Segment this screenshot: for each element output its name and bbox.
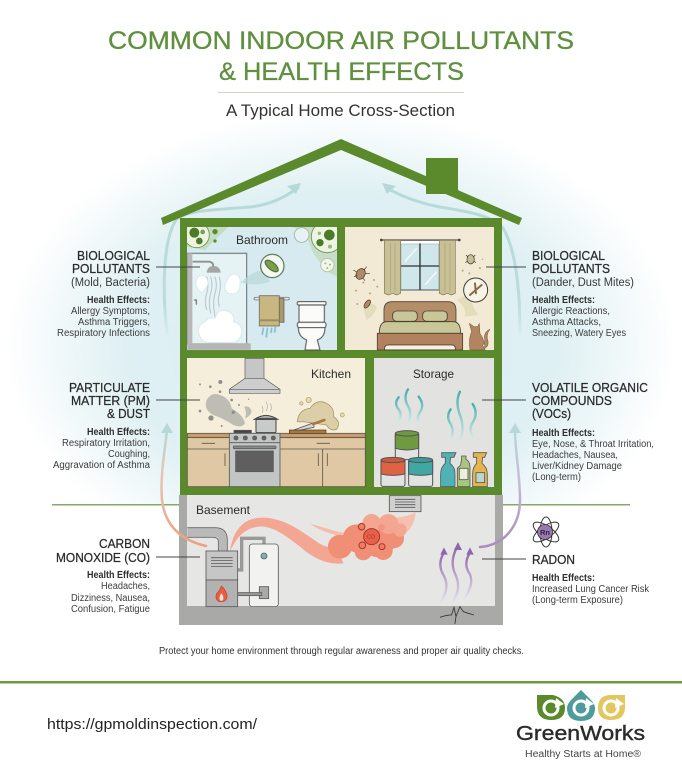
- logo: GreenWorks: Healthy Starts at Home®: [525, 749, 642, 760]
- carbon monoxide plume: CO: [367, 535, 375, 541]
- ground line: [52, 504, 630, 506]
- callout: VOCs: Eye, Nose, & Throat Irritation,: [532, 439, 654, 450]
- furnace: [206, 551, 238, 607]
- callout: VOCs: COMPOUNDS: [532, 394, 612, 408]
- bed: [377, 302, 463, 350]
- logo: GreenWorks: [516, 690, 645, 760]
- callout: biological pollutants (mold): Allergy Symptoms,: [71, 306, 150, 317]
- callout: VOCs: [482, 381, 654, 483]
- callout: particulate matter: Respiratory Irritation,: [62, 438, 150, 449]
- panel: bedroom: [353, 239, 490, 350]
- callout: biological pollutants (dander): Allergic Reactions,: [532, 306, 610, 317]
- callout: particulate matter: MATTER (PM): [71, 394, 150, 408]
- foundation crack: [440, 607, 474, 624]
- basement shell: [179, 495, 503, 625]
- callout: radon: RADON: [532, 553, 575, 567]
- icon: green swirl: [537, 695, 565, 720]
- callout: carbon monoxide: Dizziness, Nausea,: [71, 593, 150, 604]
- callout: biological pollutants (dander): (Dander, Dust Mites): [532, 277, 634, 289]
- panel: bathroom: [184, 221, 343, 350]
- water heater: [238, 538, 278, 607]
- website url: https://gpmoldinspection.com/: [47, 716, 258, 733]
- rising arrows from basement: [161, 423, 521, 547]
- dust mites: [353, 255, 478, 320]
- cleaning bottles: [441, 453, 487, 487]
- label: Basement: Basement: [196, 503, 251, 517]
- cabinets: [187, 433, 365, 487]
- callout: biological pollutants (dander): Sneezing, Watery Eyes: [532, 328, 626, 339]
- callout: biological pollutants (dander): BIOLOGICAL: [532, 249, 605, 263]
- callout: VOCs: Health Effects:: [532, 428, 595, 439]
- icon: teal swirl: [567, 690, 595, 721]
- icon: radon atom: [530, 517, 562, 547]
- callout: carbon monoxide: CARBON: [99, 537, 150, 551]
- walls: [180, 218, 502, 495]
- bacteria callout: [241, 254, 284, 284]
- title: [108, 27, 574, 86]
- label: Kitchen: Kitchen: [311, 367, 351, 381]
- icon: yellow swirl: [598, 695, 625, 720]
- callout: biological pollutants (mold): Asthma Triggers,: [78, 317, 150, 328]
- title: & HEALTH EFFECTS: [219, 58, 464, 86]
- callout: VOCs: Liver/Kidney Damage: [532, 461, 622, 472]
- ductwork: [187, 532, 223, 551]
- callout: radon: [482, 553, 650, 606]
- kitchen background: [187, 358, 365, 487]
- callout: biological pollutants (dander): Health Effects:: [532, 295, 595, 306]
- radon arrows: [440, 547, 471, 602]
- callout: particulate matter: Aggravation of Asthma: [53, 460, 150, 471]
- dander callout: [464, 278, 488, 302]
- callout: biological pollutants (mold): (Mold, Bacteria): [71, 277, 150, 289]
- callout: particulate matter: Health Effects:: [87, 427, 150, 438]
- callout: carbon monoxide: Headaches,: [101, 581, 150, 592]
- storage background: [374, 358, 494, 487]
- icon: radon atom: Rn: [540, 528, 550, 537]
- roof: [161, 139, 522, 225]
- callout: VOCs: VOLATILE ORGANIC: [532, 381, 648, 395]
- label: Storage: Storage: [413, 367, 454, 381]
- callout: VOCs: Headaches, Nausea,: [532, 450, 618, 461]
- callout: particulate matter: [53, 381, 200, 471]
- particulate smoke: [196, 380, 252, 427]
- paint cans: [381, 431, 433, 486]
- footer note: Protect your home environment through regular awareness and proper air quality checks.: [159, 646, 524, 657]
- callout: particulate matter: Coughing,: [108, 449, 150, 460]
- subtitle: A Typical Home Cross-Section: [226, 101, 455, 120]
- chimney: [426, 158, 458, 194]
- house structure: [161, 139, 522, 625]
- mold patches: [187, 227, 337, 276]
- callout: radon: (Long-term Exposure): [532, 595, 623, 606]
- stove: [229, 430, 280, 487]
- logo: GreenWorks: GreenWorks: [516, 723, 645, 745]
- pot: [253, 402, 279, 433]
- callout: particulate matter: PARTICULATE: [69, 381, 150, 395]
- callout: carbon monoxide: MONOXIDE (CO): [56, 551, 150, 565]
- callout: carbon monoxide: Health Effects:: [87, 570, 150, 581]
- callout: particulate matter: & DUST: [107, 407, 150, 421]
- callout: biological pollutants (dander): [486, 249, 634, 339]
- callout: carbon monoxide: [56, 537, 200, 615]
- toilet: [297, 302, 326, 350]
- panel: basement: [187, 496, 474, 624]
- panel: kitchen: [187, 358, 365, 487]
- upward air arrows behind the house: [164, 183, 520, 333]
- shower: [187, 253, 251, 350]
- title: COMMON INDOOR AIR POLLUTANTS: [108, 27, 574, 55]
- carbon monoxide plume: [230, 512, 416, 564]
- callout: radon: Health Effects:: [532, 573, 595, 584]
- vent: [389, 496, 421, 512]
- range hood: [229, 358, 280, 393]
- cutting board and fumes: [289, 397, 344, 433]
- towel: [254, 296, 289, 337]
- callout: biological pollutants (mold): [57, 249, 200, 339]
- callout: biological pollutants (mold): Respiratory Infections: [57, 328, 150, 339]
- bathroom background: [187, 227, 337, 350]
- callout: biological pollutants (dander): Asthma Attacks,: [532, 317, 601, 328]
- window and curtains: [380, 239, 461, 295]
- VOC vapour: [396, 389, 476, 441]
- panel: storage: [381, 389, 487, 487]
- cat: [469, 323, 490, 350]
- callout: biological pollutants (mold): POLLUTANTS: [72, 262, 150, 276]
- callout: VOCs: (VOCs): [532, 407, 571, 421]
- callout: radon: Increased Lung Cancer Risk: [532, 584, 650, 595]
- callout: biological pollutants (mold): Health Effects:: [87, 295, 150, 306]
- callout: biological pollutants (dander): POLLUTANTS: [532, 262, 610, 276]
- bedroom background: [345, 227, 494, 350]
- callout: carbon monoxide: Confusion, Fatigue: [71, 604, 150, 615]
- label: Bathroom: Bathroom: [236, 233, 288, 247]
- callout: biological pollutants (mold): BIOLOGICAL: [77, 249, 150, 263]
- callout: VOCs: (Long-term): [532, 472, 581, 483]
